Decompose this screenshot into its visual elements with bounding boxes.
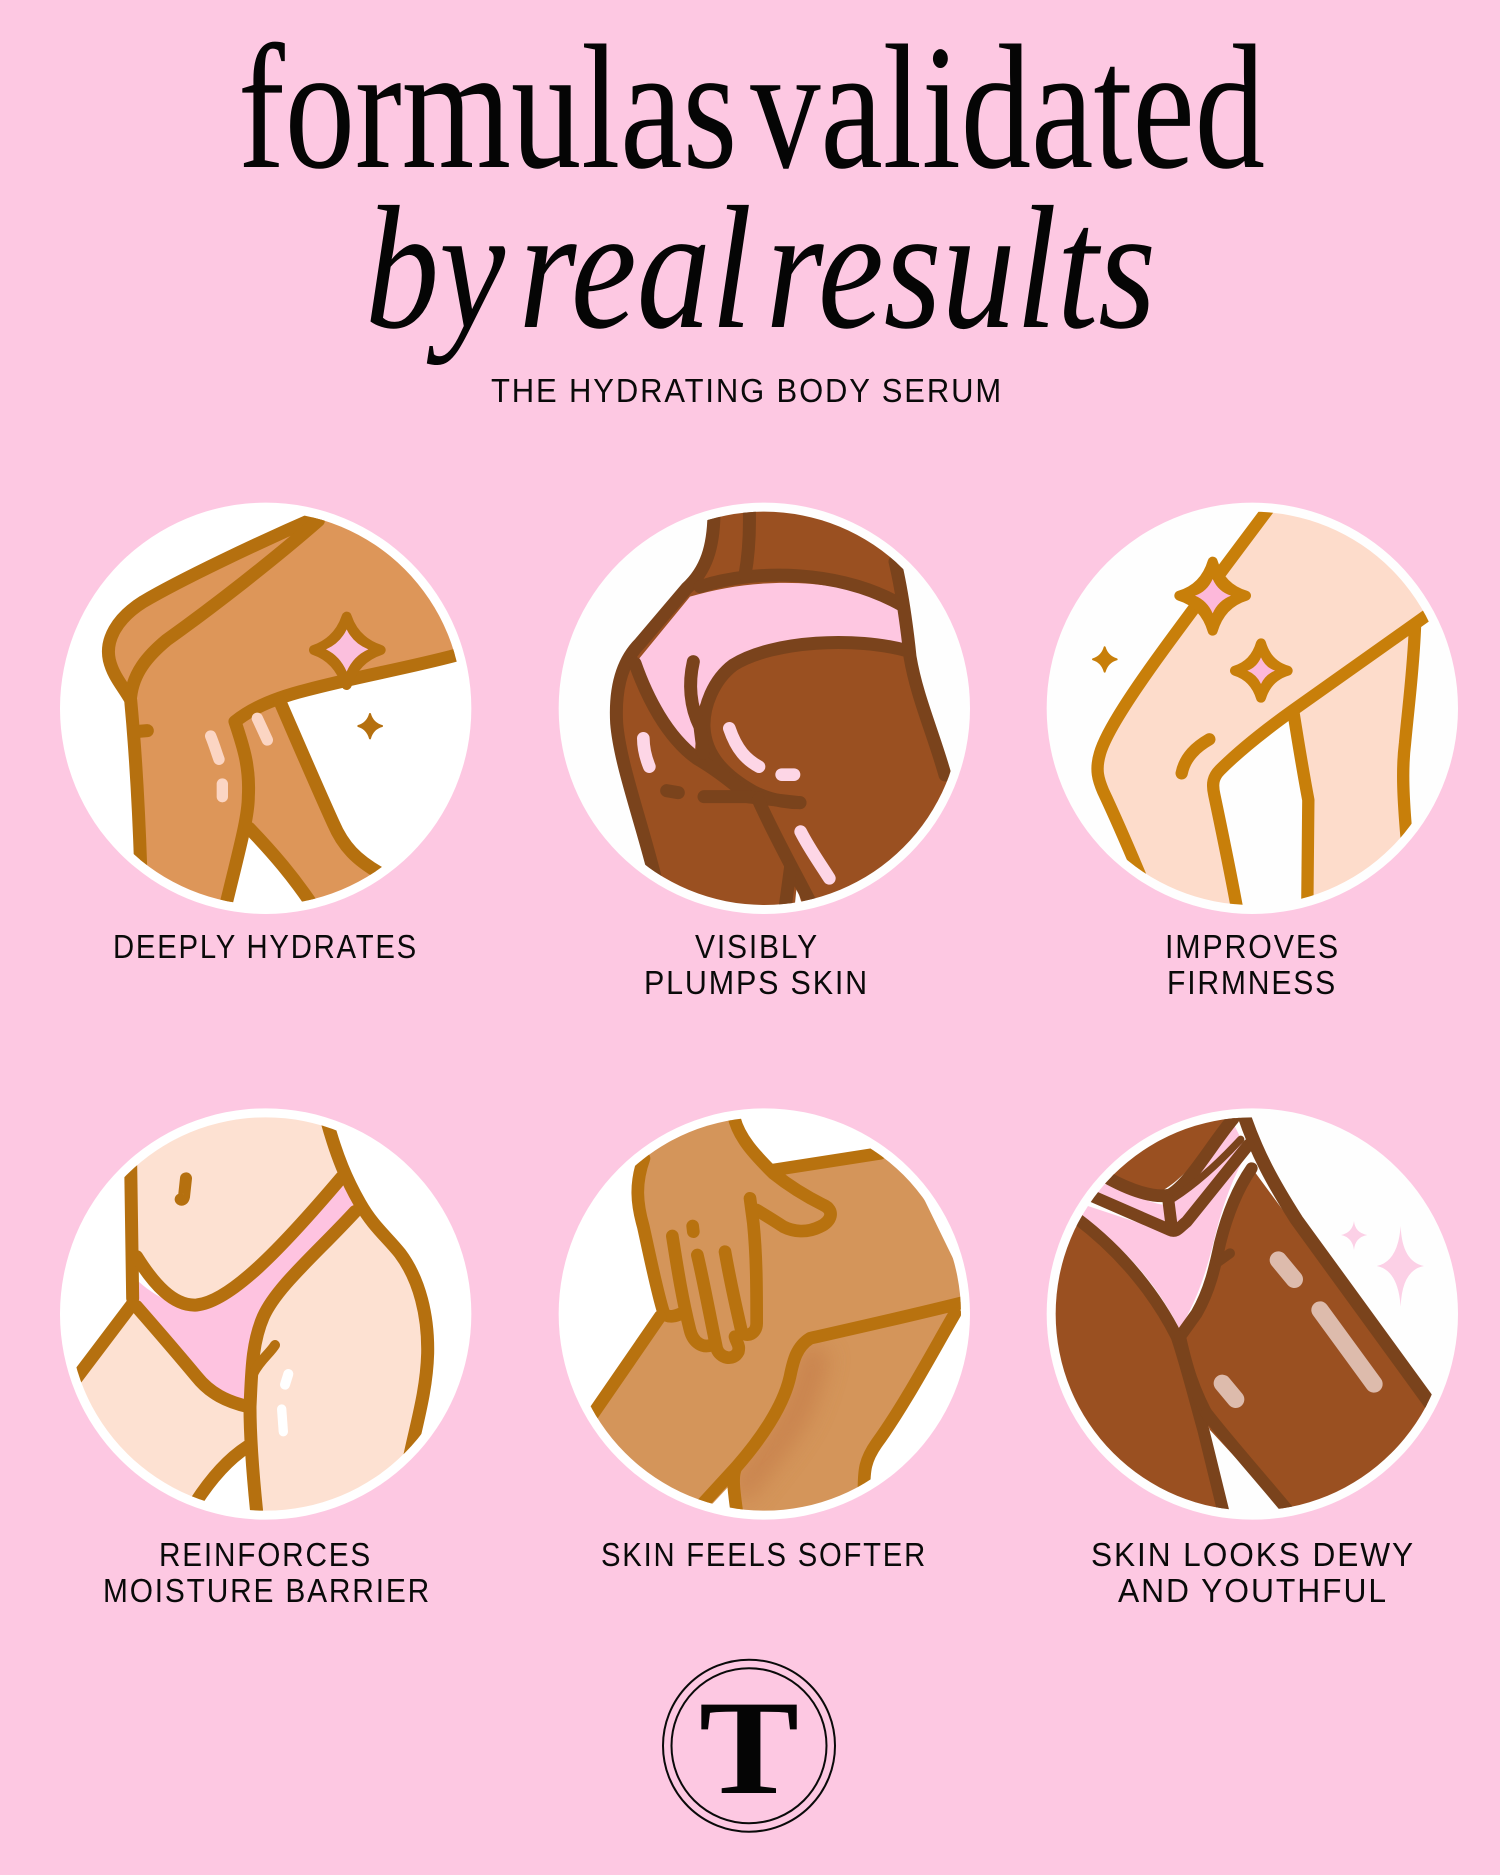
panel: improves firmness bbox=[1047, 497, 1463, 1001]
icon: knee illustration, tan skin bbox=[60, 503, 473, 920]
label: improves firmness: FIRMNESS bbox=[1167, 964, 1337, 1001]
subtitle: THE HYDRATING BODY SERUM bbox=[491, 372, 1003, 409]
label: improves firmness bbox=[1165, 928, 1340, 1001]
title bbox=[238, 8, 1265, 366]
label: visibly plumps skin: VISIBLY bbox=[695, 928, 819, 965]
panel: skin feels softer bbox=[559, 1108, 973, 1573]
label: visibly plumps skin bbox=[644, 928, 869, 1001]
panel: reinforces moisture barrier bbox=[60, 1103, 471, 1609]
icon: hip illustration, light skin bbox=[60, 1103, 471, 1530]
label: skin looks dewy and youthful: SKIN LOOKS DEWY bbox=[1091, 1536, 1415, 1573]
label: skin feels softer: SKIN FEELS SOFTER bbox=[601, 1536, 927, 1573]
logo: T monogram in double circle: T bbox=[699, 1674, 799, 1823]
label: skin looks dewy and youthful bbox=[1091, 1536, 1415, 1609]
icon: hip illustration, dark skin with sparkles bbox=[1040, 1108, 1458, 1530]
label: reinforces moisture barrier: MOISTURE BARRIER bbox=[103, 1572, 431, 1609]
label: improves firmness: IMPROVES bbox=[1165, 928, 1340, 965]
label: reinforces moisture barrier: REINFORCES bbox=[159, 1536, 372, 1573]
label: deeply hydrates: DEEPLY HYDRATES bbox=[113, 928, 418, 965]
label: reinforces moisture barrier bbox=[103, 1536, 431, 1609]
title: by real results bbox=[365, 171, 1156, 366]
icon: bent leg illustration, light skin bbox=[1047, 497, 1463, 920]
panel: visibly plumps skin bbox=[559, 497, 973, 1001]
panel: deeply hydrates bbox=[60, 503, 473, 965]
panel: skin looks dewy and youthful bbox=[1040, 1108, 1458, 1609]
icon: hand on thigh illustration bbox=[559, 1108, 973, 1530]
icon: back view illustration, dark skin bbox=[559, 497, 973, 947]
label: visibly plumps skin: PLUMPS SKIN bbox=[644, 964, 869, 1001]
logo: T monogram in double circle bbox=[663, 1660, 835, 1832]
label: skin looks dewy and youthful: AND YOUTHFUL bbox=[1118, 1572, 1388, 1609]
